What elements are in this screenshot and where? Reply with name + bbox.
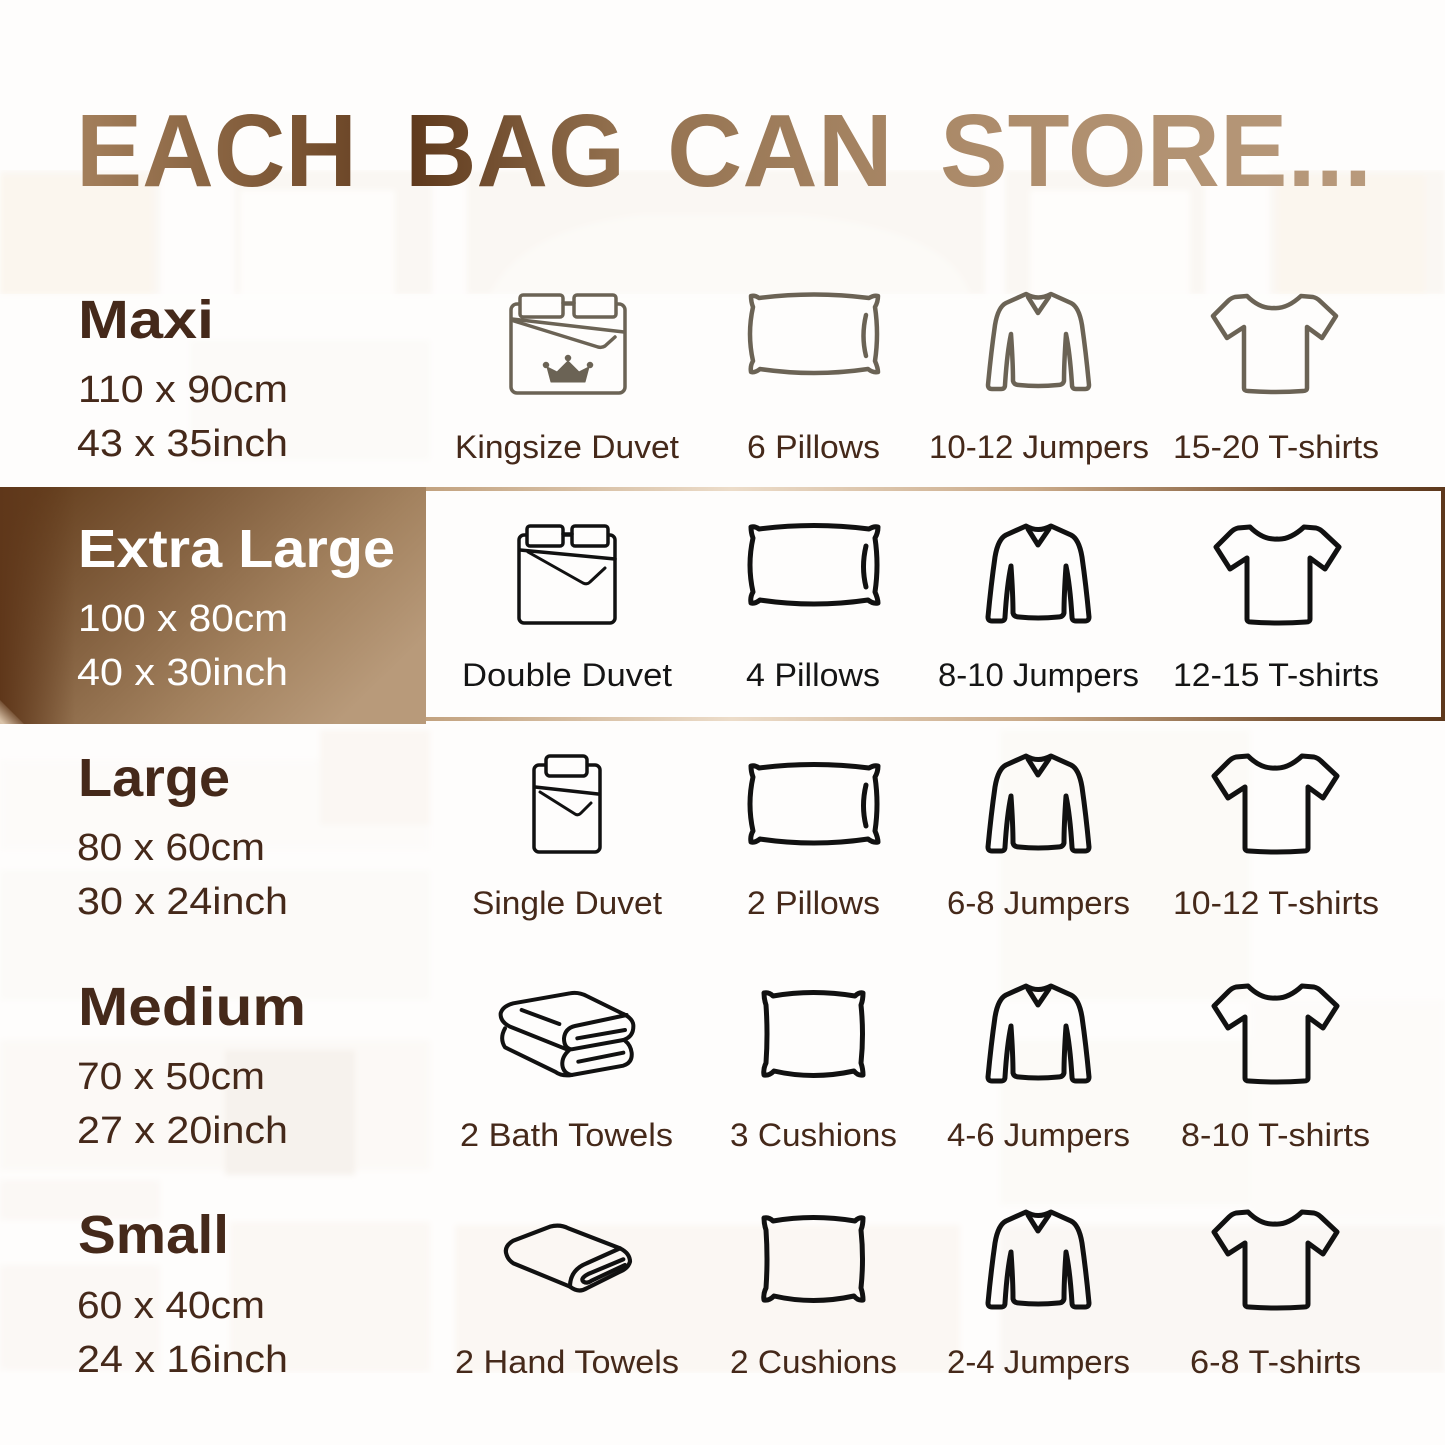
labels: 10-12 T-shirts bbox=[1173, 885, 1379, 921]
labels: 6 Pillows bbox=[747, 429, 880, 465]
size label: Medium: 27 x 20inch bbox=[77, 1110, 288, 1152]
size label: Large bbox=[77, 748, 288, 923]
labels: 2 Bath Towels bbox=[460, 1117, 673, 1153]
icon: cushion bbox=[764, 992, 863, 1076]
size label: Maxi: 43 x 35inch bbox=[77, 423, 288, 465]
highlight frame: extra large row bbox=[426, 489, 1443, 719]
row: Small bbox=[77, 1205, 1361, 1381]
size label: Medium: 70 x 50cm bbox=[77, 1056, 265, 1098]
labels: 8-10 T-shirts bbox=[1181, 1117, 1370, 1153]
icon: t-shirt bbox=[1214, 756, 1337, 852]
labels: 12-15 T-shirts bbox=[1173, 657, 1379, 693]
icon: single duvet bbox=[534, 756, 600, 852]
labels bbox=[462, 657, 1379, 693]
size label: Extra Large: Extra Large bbox=[78, 519, 395, 579]
labels: Single Duvet bbox=[472, 885, 662, 921]
size label: Extra Large: 40 x 30inch bbox=[77, 652, 288, 694]
row: Maxi bbox=[77, 290, 1379, 465]
icon: jumper bbox=[988, 526, 1089, 621]
title: STORE... bbox=[940, 93, 1372, 208]
labels: 2-4 Jumpers bbox=[947, 1344, 1130, 1380]
icon: jumper bbox=[988, 756, 1089, 851]
icon: t-shirt bbox=[1214, 986, 1337, 1082]
title bbox=[76, 93, 1372, 208]
icon: t-shirt bbox=[1213, 296, 1336, 392]
size label: Small: Small bbox=[78, 1205, 229, 1265]
icon: pillow bbox=[750, 294, 878, 373]
size label: Small bbox=[77, 1205, 288, 1381]
labels: 6-8 T-shirts bbox=[1190, 1344, 1361, 1380]
labels: 10-12 Jumpers bbox=[929, 429, 1149, 465]
labels: 6-8 Jumpers bbox=[947, 885, 1130, 921]
labels bbox=[455, 429, 1379, 465]
labels: 2 Hand Towels bbox=[455, 1344, 679, 1380]
icon: kingsize duvet bbox=[511, 295, 625, 393]
labels: 15-20 T-shirts bbox=[1173, 429, 1379, 465]
icon: hand towels bbox=[506, 1226, 630, 1290]
highlight band: extra large bbox=[0, 487, 426, 724]
labels: 3 Cushions bbox=[730, 1117, 897, 1153]
labels: 8-10 Jumpers bbox=[938, 657, 1139, 693]
labels: 2 Cushions bbox=[730, 1344, 897, 1380]
size label: Small: 60 x 40cm bbox=[77, 1285, 265, 1327]
icon: t-shirt bbox=[1214, 1212, 1337, 1308]
row: Extra Large bbox=[77, 519, 1379, 694]
title: BAG bbox=[405, 93, 625, 208]
labels: Kingsize Duvet bbox=[455, 429, 679, 465]
icon: pillow bbox=[750, 764, 878, 843]
size label: Large: Large bbox=[78, 748, 230, 808]
icon: jumper bbox=[988, 986, 1089, 1081]
icon: pillow bbox=[750, 526, 878, 604]
labels: 4 Pillows bbox=[746, 657, 880, 693]
icon: double duvet bbox=[519, 526, 615, 623]
icon: t-shirt bbox=[1216, 527, 1339, 623]
size label: Medium bbox=[77, 977, 306, 1152]
icon: jumper bbox=[988, 1212, 1089, 1307]
size label: Maxi bbox=[77, 290, 288, 465]
title: CAN bbox=[667, 93, 893, 208]
size label: Medium: Medium bbox=[78, 977, 306, 1037]
labels: 2 Pillows bbox=[747, 885, 880, 921]
size label: Large: 80 x 60cm bbox=[77, 827, 265, 869]
size label: Maxi: Maxi bbox=[78, 290, 214, 350]
icon: cushion bbox=[764, 1218, 863, 1300]
size label: Maxi: 110 x 90cm bbox=[78, 369, 288, 411]
title: EACH bbox=[76, 93, 357, 208]
size label: Large: 30 x 24inch bbox=[77, 881, 288, 923]
size label: Extra Large bbox=[77, 519, 395, 694]
icon: bath towels bbox=[501, 993, 633, 1075]
row: Medium bbox=[77, 977, 1370, 1153]
size label: Small: 24 x 16inch bbox=[77, 1339, 288, 1381]
labels bbox=[455, 1344, 1361, 1380]
labels bbox=[460, 1117, 1370, 1153]
row: Large bbox=[77, 748, 1379, 923]
size label: Extra Large: 100 x 80cm bbox=[78, 598, 288, 640]
labels: Double Duvet bbox=[462, 657, 672, 693]
labels bbox=[472, 885, 1379, 921]
icon: jumper bbox=[988, 294, 1089, 389]
labels: 4-6 Jumpers bbox=[947, 1117, 1130, 1153]
